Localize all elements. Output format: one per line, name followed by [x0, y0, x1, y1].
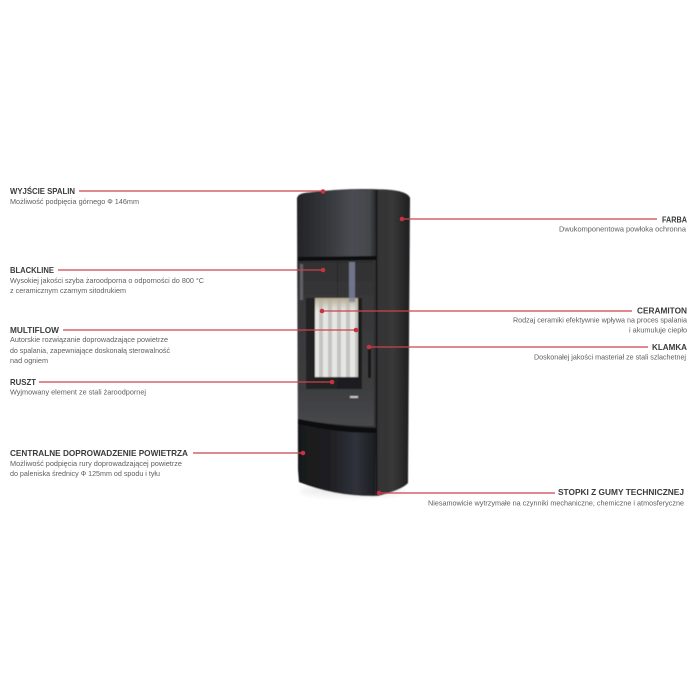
glass door: [298, 260, 374, 426]
description: Doskonałej jakości masteriał ze stali szlachetnej: [534, 352, 686, 362]
callout: farba: [400, 216, 687, 234]
callout: ceramiton: [320, 306, 688, 334]
callout: ruszt: [10, 378, 334, 396]
pointer: [377, 491, 555, 495]
description: Możliwość podpięcia górnego Ф 146mm: [10, 197, 139, 206]
description: Niesamowicie wytrzymałe na czynniki mechaniczne, chemiczne i atmosferyczne: [428, 498, 684, 508]
description: [513, 316, 688, 334]
door band: [298, 256, 377, 261]
heading: KLAMKA: [652, 343, 687, 352]
callouts: [10, 185, 688, 508]
callout: multiflow: [10, 326, 358, 365]
callout: wyjście spalin: [10, 185, 325, 206]
upper front panel: [298, 190, 376, 258]
lower band: [298, 419, 377, 433]
glass reflection: [349, 262, 355, 302]
base panel: [298, 424, 376, 495]
door handle: [368, 349, 371, 378]
description: Wyjmowany element ze stali żaroodpornej: [10, 388, 146, 396]
pointer: [193, 451, 305, 455]
description: Dwukomponentowa powłoka ochronna: [559, 224, 687, 234]
pointer: [39, 380, 334, 384]
description: i akumuluje ciepło: [629, 326, 687, 334]
description: do paleniska średnicy Ф 125mm od spodu i tyłu: [10, 469, 160, 478]
heading: CERAMITON: [637, 306, 687, 316]
pointer: [63, 328, 358, 332]
heading: FARBA: [662, 216, 687, 224]
heading: RUSZT: [10, 378, 36, 387]
pointer: [367, 345, 648, 349]
description: Autorskie rozwiązanie doprowadzające powietrze: [10, 335, 168, 344]
description: do spalania, zapewniające doskonałą sterowalność: [10, 346, 170, 355]
stove body: [297, 189, 410, 496]
inner glass frame: [306, 298, 362, 389]
description: Wysokiej jakości szyba żaroodporna o odporności do 800 °C: [10, 276, 205, 285]
heading: WYJŚCIE SPALIN: [10, 185, 75, 196]
description: z ceramicznym czarnym sitodrukiem: [10, 286, 126, 295]
pointer: [320, 309, 632, 313]
firebox window: [315, 298, 358, 377]
heading: CENTRALNE DOPROWADZENIE POWIETRZA: [10, 449, 188, 458]
description: Rodzaj ceramiki efektywnie wpływa na proces spalania: [513, 316, 688, 324]
pointer: [79, 189, 325, 194]
callout: klamka: [367, 343, 687, 362]
description: [10, 276, 205, 295]
description: [10, 459, 182, 478]
pointer: [58, 268, 325, 272]
glass divider: [337, 261, 338, 298]
logo plate: [350, 396, 358, 398]
description: nad ogniem: [10, 356, 48, 365]
callout: blackline: [10, 266, 325, 295]
stove: [297, 189, 410, 497]
firebox top shade: [315, 298, 358, 312]
description: Możliwość podpięcia rury doprowadzającej powietrze: [10, 459, 182, 468]
pointer: [400, 217, 657, 221]
heading: MULTIFLOW: [10, 326, 59, 335]
side seam: [376, 190, 378, 495]
callout: centralne doprowadzenie powietrza: [10, 449, 305, 478]
callout: stopki z gumy technicznej: [377, 488, 684, 508]
heading: STOPKI Z GUMY TECHNICZNEJ: [558, 488, 684, 497]
heading: BLACKLINE: [10, 266, 54, 275]
left reflection: [300, 264, 303, 300]
floor shadow: [300, 485, 404, 497]
description: [10, 335, 170, 365]
